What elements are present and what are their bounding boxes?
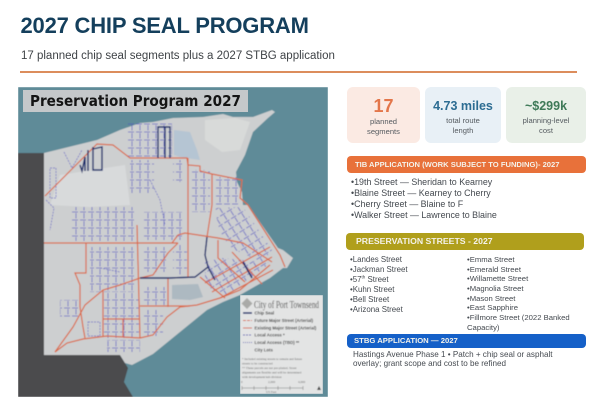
preservation list right column: •Magnolia Street [467, 284, 524, 293]
STBG description: overlay; grant scope and cost to be refined [353, 358, 506, 368]
stat card: planned segments [347, 87, 420, 143]
map legend: Chip Seal [254, 310, 274, 316]
STBG description: Hastings Avenue Phase 1 • Patch + chip seal or asphalt [353, 350, 553, 358]
header rule [20, 71, 577, 73]
stat card: planned segments: segments [367, 127, 400, 136]
preservation list left column [350, 255, 408, 314]
map legend: US Feet [266, 390, 276, 394]
local street grid [46, 123, 272, 352]
preservation streets heading: PRESERVATION STREETS - 2027 [356, 236, 493, 246]
map legend: City Lots [254, 348, 273, 352]
map title label: Preservation Program 2027 [30, 92, 241, 110]
preservation list left column: •Arizona Street [350, 304, 403, 314]
preservation list right column: Capacity) [467, 322, 499, 332]
stat card: planned segments: 17 [373, 96, 394, 116]
preservation list left column: •Bell Street [350, 295, 389, 304]
preservation list right column [467, 255, 570, 332]
STBG description [353, 350, 553, 368]
stat card: total route length: length [453, 126, 473, 135]
stat card: planned segments: planned [370, 117, 397, 126]
stat card: planning-level cost: planning-level [523, 116, 569, 125]
legend logo [242, 298, 252, 309]
TIB street list [351, 177, 497, 220]
preservation list left column: •Kuhn Street [350, 285, 394, 294]
map legend [240, 295, 323, 394]
subtitle: 17 planned chip seal segments plus a 2027 STBG application [21, 50, 335, 62]
preservation list right column: •Willamette Street [467, 274, 528, 283]
TIB street list: •Walker Street — Lawrence to Blaine [351, 210, 497, 220]
map legend: 2,000 [268, 380, 276, 385]
preservation list right column: •Emma Street [467, 255, 515, 264]
TIB street list: •19th Street — Sheridan to Kearney [351, 177, 492, 187]
TIB street list: •Cherry Street — Blaine to F [351, 199, 463, 209]
TIB application heading [347, 156, 586, 173]
map panel [18, 87, 328, 397]
preservation streets heading [346, 233, 584, 250]
map legend: 4,000 [298, 380, 306, 385]
map base [18, 87, 328, 397]
map legend: with development/sub-division [242, 375, 282, 379]
preservation list right column: •Fillmore Street (2022 Banked [467, 312, 570, 322]
stat card: total route length: total route [446, 116, 480, 125]
map legend: Future Major Street (Arterial) [254, 318, 314, 323]
stat card: planning-level cost: cost [539, 126, 553, 135]
stat card: planning-level cost: ~$299k [525, 98, 567, 112]
chip seal segments [80, 127, 252, 280]
TIB application heading: TIB APPLICATION (WORK SUBJECT TO FUNDING)- 2027 [355, 160, 559, 169]
preservation list left column: •57th Street [350, 274, 389, 284]
STBG application heading: STBG APPLICATION — 2027 [354, 336, 458, 345]
title: 2027 CHIP SEAL PROGRAM [20, 13, 309, 38]
map legend: * Included existing streets to remain and future [242, 357, 303, 361]
preservation list right column: •East Sapphire [467, 303, 518, 312]
map legend: Existing Major Street (Arterial) [254, 326, 317, 330]
arterial roads [44, 144, 285, 352]
map legend: ** These parcels are not pre-platted. Street [242, 366, 297, 370]
preservation list left column: •Landes Street [350, 255, 402, 264]
map legend: alignments are flexible and will be determined [242, 370, 302, 374]
stat card: total route length: 4.73 miles [433, 98, 493, 112]
map legend: 0 [241, 380, 243, 384]
map legend: streets to be constructed [242, 362, 273, 366]
STBG application heading [347, 334, 586, 348]
map legend: Local Access (TBD) ** [254, 340, 300, 345]
preservation list left column: •Jackman Street [350, 265, 408, 274]
preservation list right column: •Mason Street [467, 294, 515, 302]
stat card: planning-level cost [506, 87, 586, 143]
stat card: total route length [425, 87, 501, 143]
map legend: Local Access * [254, 332, 285, 338]
TIB street list: •Blaine Street — Kearney to Cherry [351, 188, 491, 198]
preservation list right column: •Emerald Street [467, 264, 521, 274]
